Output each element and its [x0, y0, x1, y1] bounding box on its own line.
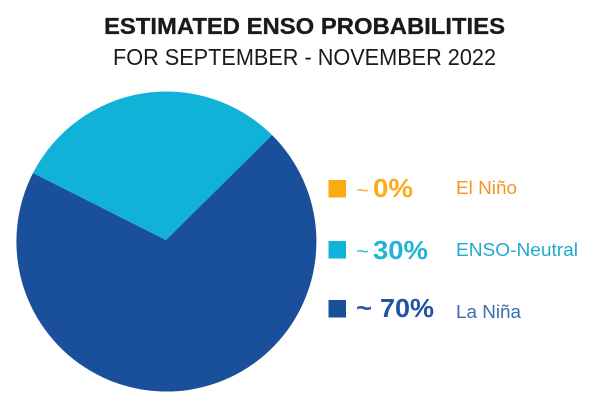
- legend row: La Niña: [328, 293, 522, 323]
- tilde: La Niña: ~: [356, 295, 372, 322]
- tilde: ENSO-Neutral: ~: [356, 242, 369, 263]
- swatch: El Niño: [328, 180, 346, 198]
- slice: ENSO-Neutral 30%: [33, 92, 272, 240]
- title: [104, 13, 505, 70]
- swatch: ENSO-Neutral: [328, 241, 346, 258]
- legend: [328, 173, 578, 323]
- slice: La Niña 70%: [16, 135, 316, 392]
- value: El Niño: 0%: [373, 173, 413, 203]
- pie chart: [16, 92, 316, 392]
- label: La Niña: La Niña: [456, 302, 522, 322]
- legend row: El Niño: [328, 173, 517, 203]
- tilde: El Niño: ~: [356, 181, 369, 202]
- value: La Niña: 70%: [380, 293, 434, 323]
- title line 1: ESTIMATED ENSO PROBABILITIES: [104, 13, 505, 39]
- value: ENSO-Neutral: 30%: [373, 235, 428, 265]
- legend row: ENSO-Neutral: [328, 235, 578, 265]
- label: ENSO-Neutral: ENSO-Neutral: [456, 240, 578, 260]
- swatch: La Niña: [328, 300, 346, 318]
- label: El Niño: El Niño: [456, 178, 517, 198]
- title line 2: FOR SEPTEMBER - NOVEMBER 2022: [113, 44, 496, 70]
